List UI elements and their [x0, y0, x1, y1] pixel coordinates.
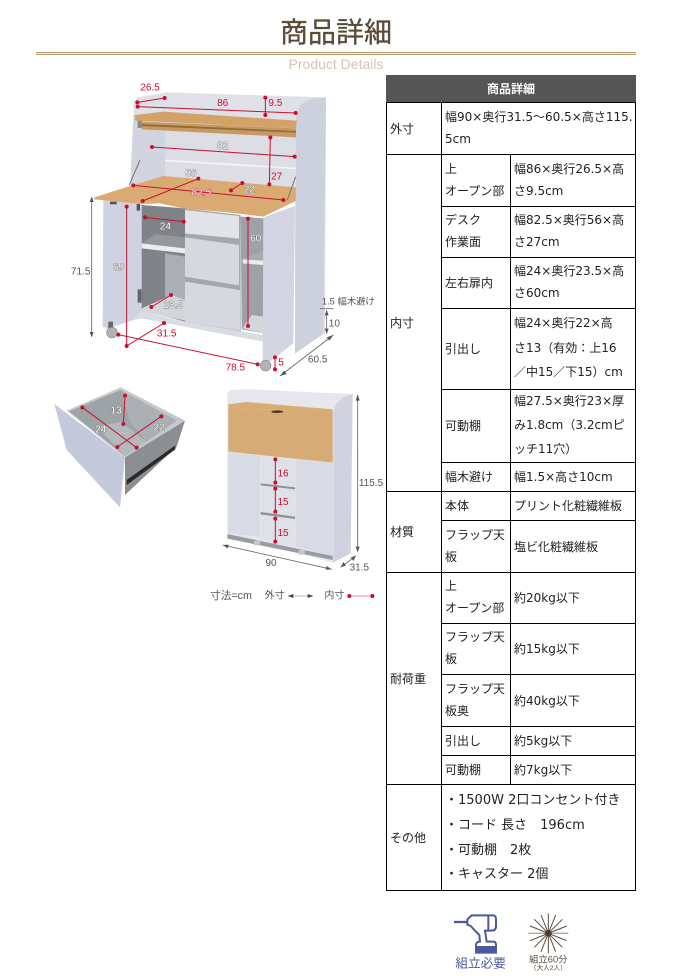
section: load capacity: 可動棚 — [445, 763, 481, 777]
dimension labels: 71.5 — [71, 266, 91, 277]
drawer: 24 — [95, 425, 107, 436]
outer dimension arrows — [90, 197, 333, 376]
section: load capacity: 約7kg以下 — [514, 763, 572, 777]
dimension labels: 60 — [250, 234, 262, 245]
dimension labels: 82.5 — [192, 188, 212, 199]
table header: 商品詳細 — [487, 82, 535, 96]
dimension labels: 24 — [160, 222, 171, 233]
section: inner size: 上 — [445, 162, 457, 176]
dimension labels: 26.5 — [140, 83, 160, 94]
section: inner size: 作業面 — [445, 235, 481, 249]
section: load capacity: フラップ天 — [445, 630, 505, 644]
closed cabinet: 15 — [277, 497, 289, 508]
section: material: 塩ビ化粧繊維板 — [514, 540, 598, 554]
dimension labels — [71, 83, 375, 373]
icons: assembly — [454, 913, 568, 972]
row: outer size: 外寸 — [390, 122, 414, 136]
diagram: open desk with dimensions — [71, 83, 375, 376]
dimension labels: 56 — [185, 168, 197, 179]
section: load capacity — [386, 573, 636, 784]
section: load capacity: フラップ天 — [445, 682, 505, 696]
legend: 外寸 — [265, 589, 285, 602]
section: material — [386, 492, 636, 572]
dimension labels: 82 — [217, 141, 229, 152]
dimension labels: 69 — [113, 263, 124, 274]
section: inner size: 幅24×奥行22×高 — [514, 316, 613, 330]
dimension labels: 31.5 — [157, 328, 177, 339]
closed cabinet: 15 — [277, 528, 289, 539]
section: inner size: さ60cm — [514, 286, 560, 300]
section: inner size: 左右扉内 — [445, 276, 493, 290]
label: 60 minutes: 組立60分 — [529, 954, 568, 965]
drawer — [54, 387, 185, 507]
icon: drill — [454, 915, 496, 953]
cabinet body — [103, 92, 326, 367]
section: inner size: デスク — [445, 213, 481, 227]
section: inner size: 幅木避け — [445, 470, 493, 484]
section: material: フラップ天 — [445, 528, 505, 542]
legend: 内寸 — [324, 589, 344, 602]
legend — [210, 589, 374, 602]
section: inner size — [386, 155, 636, 491]
closed cabinet: 16 — [277, 469, 289, 480]
section: inner size: さ9.5cm — [514, 184, 563, 198]
section: inner size: さ13（有効：上16 — [514, 341, 617, 355]
section: load capacity: 板 — [445, 652, 457, 666]
closed cabinet: 31.5 — [350, 563, 370, 574]
closed cabinet — [223, 389, 384, 574]
desk flap wood top — [94, 176, 296, 217]
label: assembly required: 組立必要 — [455, 957, 506, 971]
dimension labels: 23.5 — [164, 300, 184, 311]
section: load capacity: 約20kg以下 — [514, 591, 580, 605]
section: inner size: み1.8cm（3.2cmピ — [514, 418, 625, 432]
label: two adults: （大人2人） — [530, 963, 567, 972]
section: other: ・可動棚 2枚 — [445, 842, 531, 858]
section: inner size: 幅86×奥行26.5×高 — [514, 162, 624, 176]
section: inner size: 内寸 — [390, 316, 414, 330]
section: other — [386, 785, 636, 891]
dimension labels: 22 — [244, 184, 255, 195]
section: inner size: ／中15／下15）cm — [514, 365, 623, 379]
dimension labels: 9.5 — [268, 98, 283, 109]
dimension labels: 10 — [329, 319, 340, 330]
section: material: 板 — [445, 550, 457, 564]
desk hardware — [108, 160, 296, 328]
dimension labels: 86 — [217, 98, 229, 109]
row: outer size: 幅90×奥行31.5〜60.5×高さ115. — [445, 110, 633, 124]
drawer: 22 — [153, 423, 165, 434]
title rule — [36, 52, 636, 55]
section: inner size: 引出し — [445, 342, 481, 356]
table header — [386, 75, 636, 103]
title: 商品詳細 — [280, 17, 392, 48]
section: load capacity: 約15kg以下 — [514, 642, 580, 656]
dimension labels: 78.5 — [226, 362, 246, 373]
dimension labels: 60.5 — [308, 355, 328, 366]
section: inner size: ッチ11穴） — [514, 442, 577, 456]
section: inner size: 幅82.5×奥行56×高 — [514, 213, 624, 227]
section: load capacity: オープン部 — [445, 601, 504, 615]
closed cabinet: 90 — [265, 558, 277, 569]
icon: 60 minute burst — [528, 913, 568, 953]
section: load capacity: 引出し — [445, 734, 481, 748]
section: material: 本体 — [445, 499, 469, 513]
drawer: 13 — [110, 405, 122, 416]
section: other: ・キャスター 2個 — [445, 867, 548, 882]
section: material: プリント化粧繊維板 — [514, 499, 622, 513]
section: load capacity: 約5kg以下 — [514, 734, 572, 748]
legend: 寸法=cm — [210, 589, 252, 602]
section: other: ・1500W 2口コンセント付き — [445, 793, 620, 808]
section: load capacity: 板奥 — [445, 704, 469, 718]
section: material: 材質 — [390, 525, 414, 539]
section: inner size: 幅1.5×高さ10cm — [514, 470, 613, 484]
dimension labels: 27 — [271, 171, 283, 182]
inner dimension dots — [116, 96, 298, 371]
subtitle: Product Details — [289, 56, 383, 72]
inner dimension lines — [118, 98, 296, 369]
dimension labels: 1.5 幅木避け — [322, 296, 375, 307]
dimension labels: 5 — [278, 358, 284, 369]
section: load capacity: 上 — [445, 579, 457, 593]
section: other: その他 — [390, 830, 426, 844]
section: inner size: 幅24×奥行23.5×高 — [514, 264, 624, 278]
section: inner size: オープン部 — [445, 184, 504, 198]
row: outer size: 5cm — [445, 132, 471, 146]
diagram: drawer and closed cabinet — [54, 388, 384, 602]
section: inner size: 可動棚 — [445, 419, 481, 433]
casters — [107, 327, 271, 371]
section: load capacity: 耐荷重 — [390, 672, 426, 686]
section: inner size: さ27cm — [514, 235, 560, 249]
row: outer size — [386, 102, 636, 154]
section: other: ・コード 長さ 196cm — [445, 818, 585, 833]
section: load capacity: 約40kg以下 — [514, 694, 580, 708]
section: inner size: 幅27.5×奥行23×厚 — [514, 394, 624, 408]
closed cabinet: 115.5 — [359, 478, 384, 489]
